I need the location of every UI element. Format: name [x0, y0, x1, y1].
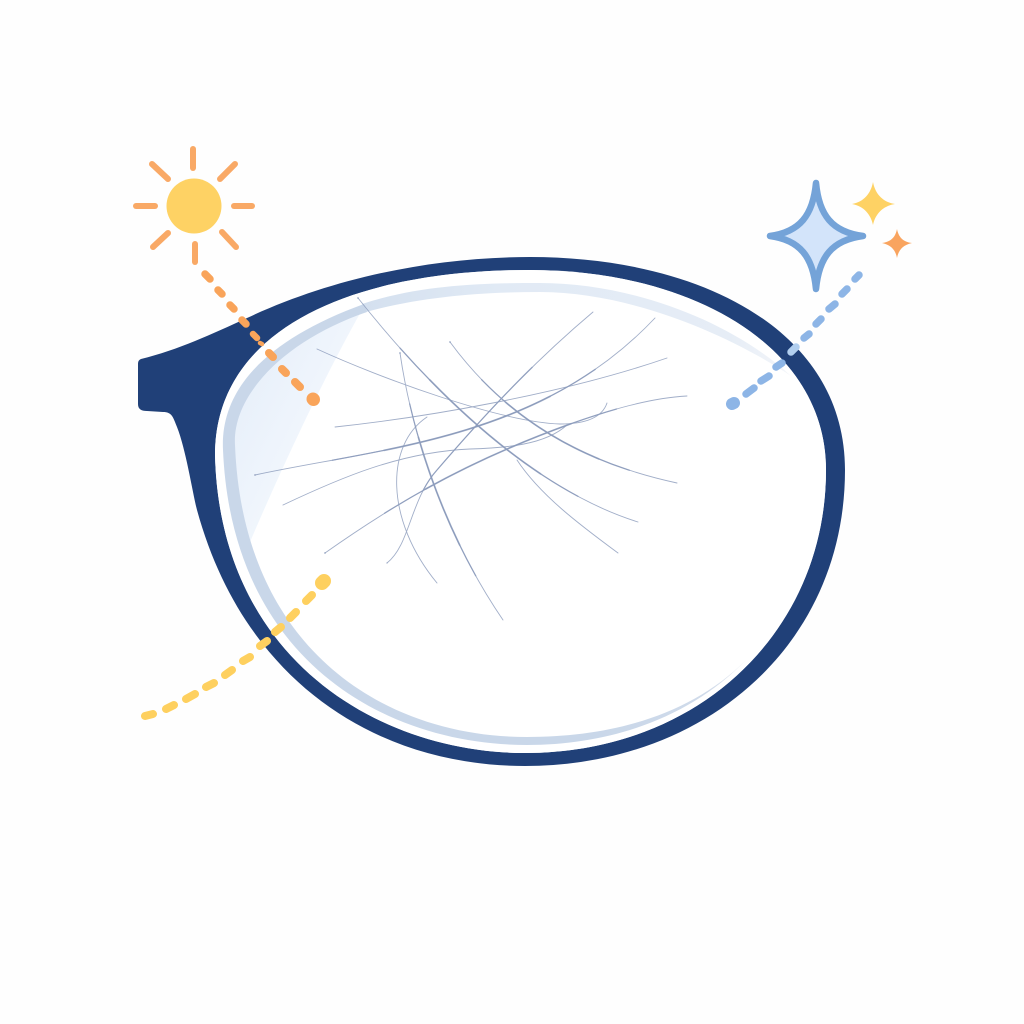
scratch: darker central sections [255, 298, 687, 620]
icon: orange sparkle [882, 229, 912, 258]
icon: sun [136, 149, 252, 262]
lens rim band: left and bottom [223, 304, 746, 745]
eyeglass frame [138, 257, 845, 766]
lens rim band: top [362, 283, 791, 376]
arrow: blue dashed light ray [732, 275, 859, 404]
scratches [255, 298, 687, 620]
scratch: medium sections [255, 298, 687, 620]
scratch: thin full lengths [255, 298, 687, 620]
lens glare highlight [229, 303, 366, 542]
sun rays [136, 149, 252, 262]
sun disc [166, 178, 222, 234]
icon: large sparkle [770, 183, 863, 289]
arrow: yellow dashed light ray [145, 581, 324, 716]
lens [215, 270, 826, 753]
icon: yellow sparkle [852, 182, 895, 225]
arrow: orange dashed light ray [205, 274, 314, 400]
